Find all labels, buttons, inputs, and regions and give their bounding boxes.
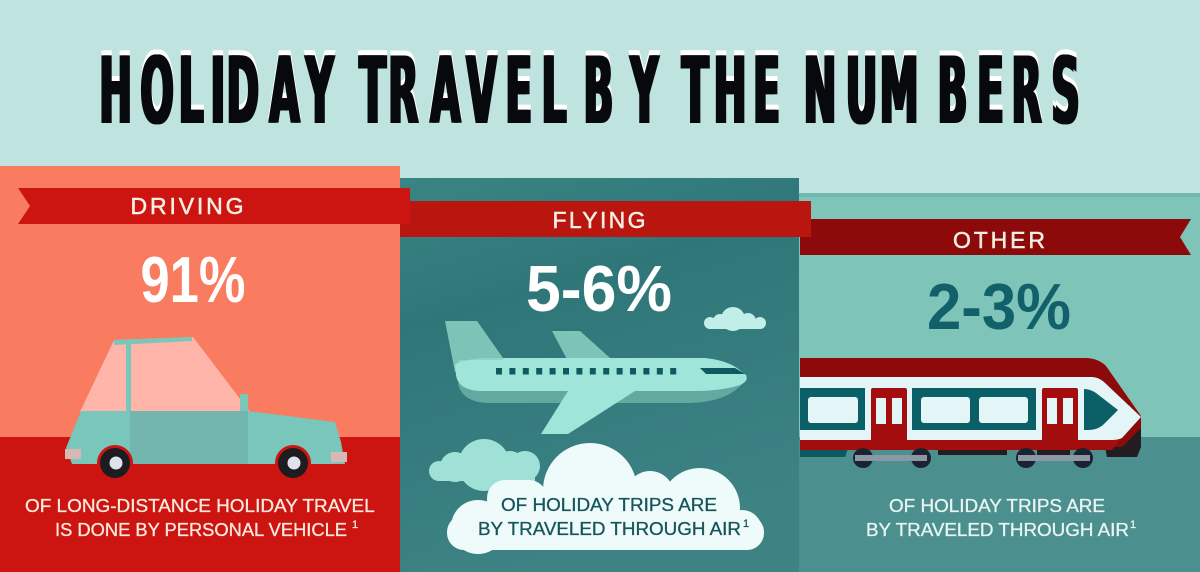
- text: flying caption: OF HOLIDAY TRIPS ARE: [501, 495, 717, 515]
- text: driving caption: IS DONE BY PERSONAL VEHICLE: [55, 520, 347, 540]
- title: HOLIDAY TRAVEL BY THE NUMBERS: [98, 37, 1078, 145]
- panel: driving: [0, 166, 400, 572]
- icon: train: [800, 358, 1141, 468]
- ribbon: other: OTHER: [953, 227, 1045, 253]
- icon: small cloud: [704, 307, 766, 331]
- icon: airplane: [445, 321, 747, 434]
- ribbon: other: [800, 219, 1191, 255]
- text: flying caption: BY TRAVELED THROUGH AIR: [478, 519, 741, 539]
- panel: flying: [400, 178, 799, 572]
- statistic: driving: 91%: [140, 243, 246, 316]
- ribbon: driving: [18, 188, 410, 224]
- icon: car: [65, 337, 347, 481]
- title: HOLIDAY TRAVEL BY THE NUMBERS: [101, 37, 1081, 145]
- text: flying caption: 1: [743, 518, 749, 530]
- panel: other: [799, 193, 1200, 572]
- text: other caption: BY TRAVELED THROUGH AIR: [866, 520, 1129, 540]
- statistic: other: 2-3%: [927, 270, 1071, 343]
- title: HOLIDAY TRAVEL BY THE NUMBERS: [98, 32, 1078, 140]
- ribbon: flying: FLYING: [552, 207, 646, 233]
- ribbon: flying: [400, 201, 811, 237]
- text: driving caption: 1: [352, 519, 358, 531]
- statistic: flying: 5-6%: [526, 252, 672, 325]
- text: driving caption: OF LONG-DISTANCE HOLIDAY TRAVEL: [25, 496, 375, 516]
- ribbon: driving: DRIVING: [130, 193, 244, 219]
- text: other caption: 1: [1130, 519, 1136, 531]
- title: HOLIDAY TRAVEL BY THE NUMBERS: [101, 32, 1081, 140]
- icon: medium cloud: [429, 439, 540, 491]
- icon: large cloud with caption: [447, 443, 764, 554]
- text: other caption: OF HOLIDAY TRIPS ARE: [889, 496, 1105, 516]
